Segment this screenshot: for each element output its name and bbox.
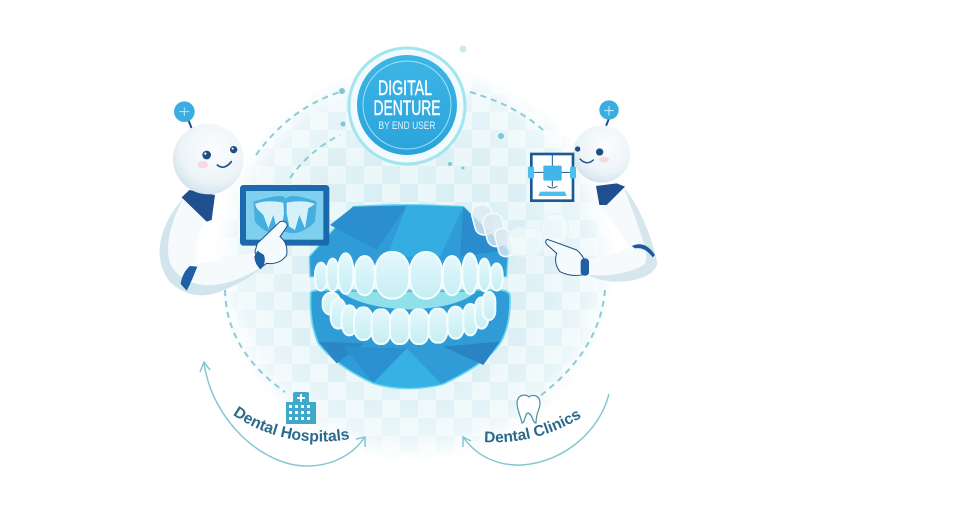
- badge text: denture: DENTURE: [374, 97, 440, 120]
- badge text: digital: DIGITAL: [378, 77, 432, 100]
- icon: hospital: [286, 392, 316, 424]
- dashed orbit ring: [225, 92, 605, 396]
- label: dental hospitals: Dental Hospitals: [233, 406, 349, 445]
- icon: tooth: [517, 395, 540, 423]
- robot: right: [528, 100, 657, 282]
- infographic canvas: [160, 46, 658, 467]
- antenna: [599, 100, 619, 126]
- elbow joint: [632, 244, 655, 257]
- checker background circle: [224, 80, 605, 453]
- collar: [182, 190, 215, 222]
- upper gum: [309, 205, 508, 277]
- upper teeth: [315, 252, 503, 299]
- arm body: [160, 198, 262, 295]
- lower teeth: [323, 292, 495, 344]
- pointing hand: [254, 221, 287, 269]
- antenna: [174, 101, 195, 128]
- glass aligner: [470, 203, 515, 258]
- lower gum: [310, 290, 510, 389]
- arrow: dental hospitals: [200, 362, 365, 466]
- label: dental clinics: Dental Clinics: [485, 411, 580, 442]
- gum band between arches: [340, 292, 477, 309]
- robot: left: [160, 101, 329, 295]
- icon: 3D printer: [528, 154, 576, 201]
- tablet: [240, 185, 329, 246]
- pointing hand: [546, 239, 589, 276]
- title badge: [349, 48, 465, 164]
- head: [573, 125, 630, 183]
- faint aligner outline: [508, 214, 568, 256]
- elbow joint: [181, 266, 197, 291]
- arrow: dental clinics: [463, 394, 609, 465]
- collar: [596, 183, 625, 205]
- head: [173, 124, 244, 194]
- arm body: [588, 187, 657, 282]
- denture model: [309, 203, 515, 389]
- floating dots: [339, 46, 504, 170]
- badge text: by end user: BY END USER: [378, 120, 436, 132]
